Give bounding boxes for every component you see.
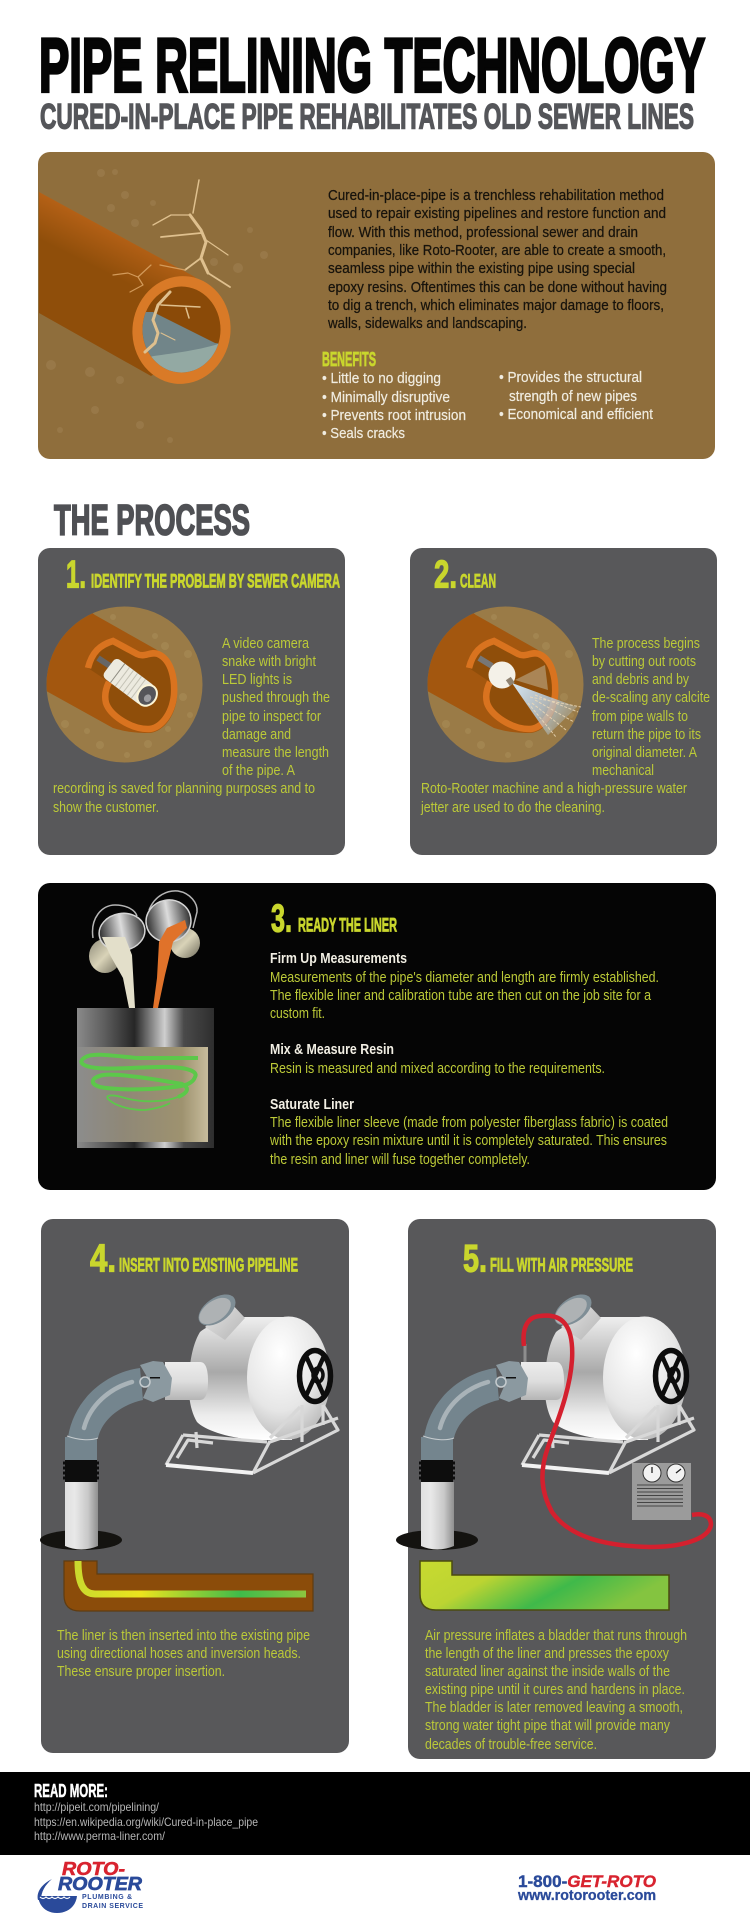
step 2 text: Roto-Rooter machine and a high-pressure water: [421, 780, 687, 797]
red air hose: [524, 1316, 711, 1547]
intro text: companies, like Roto-Rooter, are able to create a smooth,: [328, 242, 666, 259]
benefits list: • Little to no digging: [322, 370, 441, 387]
step 3 text: Mix & Measure Resin: [270, 1041, 394, 1058]
panel: step 4: [40, 1219, 349, 1753]
benefits list: • Seals cracks: [322, 425, 405, 442]
step 2 heading: CLEAN: [460, 572, 496, 592]
intro text: Cured-in-place-pipe is a trenchless rehabilitation method: [328, 187, 664, 204]
step 5 heading: [463, 1238, 633, 1280]
step 5 text: strong water tight pipe that will provide many: [425, 1717, 670, 1734]
step 1 text: LED lights is: [222, 671, 292, 688]
step 1 text: pipe to inspect for: [222, 708, 321, 725]
step 1 text: A video camera: [222, 635, 310, 652]
step 5 text: decades of trouble-free service.: [425, 1736, 597, 1753]
step 3 heading: [271, 898, 397, 940]
step 1 text: [53, 635, 330, 816]
step 2 text: The process begins: [592, 635, 700, 652]
step 1 text: damage and: [222, 726, 291, 743]
icon: sewer camera in pipe: [30, 590, 202, 762]
step 3 text: [269, 950, 668, 1168]
step 2 text: original diameter. A: [592, 744, 697, 761]
step 1 text: show the customer.: [53, 799, 159, 816]
step 2 text: de-scaling any calcite: [592, 689, 710, 706]
step 2 text: from pipe walls to: [592, 708, 688, 725]
icon: cleaning head with water jet: [411, 590, 584, 762]
intro text: walls, sidewalks and landscaping.: [327, 315, 527, 332]
step 3 text: custom fit.: [270, 1005, 325, 1022]
contact: phone and website: www.rotorooter.com: [517, 1887, 656, 1904]
step 2 text: and debris and by: [592, 671, 689, 688]
step 1 text: pushed through the: [222, 689, 330, 706]
intro text: flow. With this method, professional sewer and drain: [328, 224, 638, 241]
step 3 text: Saturate Liner: [270, 1096, 354, 1113]
illustration: cracked pipe with roots: [39, 169, 268, 443]
step 4 text: [57, 1627, 310, 1680]
step 2 text: by cutting out roots: [592, 653, 696, 670]
step 1 heading: IDENTIFY THE PROBLEM BY SEWER CAMERA: [91, 572, 340, 592]
step 5 text: The bladder is later removed leaving a smooth,: [425, 1699, 683, 1716]
step 2 text: [420, 635, 710, 816]
benefits list: • Prevents root intrusion: [322, 407, 466, 424]
intro text: epoxy resins. Oftentimes this can be done without having: [328, 279, 667, 296]
source links: http://www.perma-liner.com/: [34, 1829, 166, 1843]
panel: read more: [0, 1772, 750, 1855]
step 5 text: Air pressure inflates a bladder that runs through: [425, 1627, 687, 1644]
step 1 text: of the pipe. A: [222, 762, 295, 779]
intro text: seamless pipe within the existing pipe using special: [328, 260, 635, 277]
step 2 text: return the pipe to its: [592, 726, 701, 743]
step 3 text: with the epoxy resin mixture until it is completely saturated. This ensures: [269, 1132, 667, 1149]
illustration: inversion machine: [396, 1288, 694, 1550]
diagram: existing pipe with liner: [64, 1561, 313, 1611]
illustration: inversion machine: [40, 1288, 338, 1550]
logo: Roto-Rooter: DRAIN SERVICE: [82, 1903, 143, 1910]
step 5 text: existing pipe until it cures and hardens in place.: [425, 1681, 685, 1698]
step 3 text: the resin and liner will fuse together completely.: [270, 1151, 530, 1168]
step 3 heading: 3.: [271, 898, 292, 940]
contact: phone and website: [517, 1872, 656, 1904]
source links: http://pipeit.com/pipelining/: [34, 1800, 160, 1814]
step 1 text: measure the length: [222, 744, 329, 761]
benefits list: strength of new pipes: [509, 388, 637, 405]
logo: Roto-Rooter: ROOTER: [58, 1874, 142, 1894]
step 5 text: saturated liner against the inside walls of the: [425, 1663, 670, 1680]
benefits list: • Economical and efficient: [499, 406, 654, 423]
step 2 heading: 2.: [434, 554, 457, 596]
step 3 text: The flexible liner sleeve (made from polyester fiberglass fabric) is coated: [270, 1114, 668, 1131]
step 3 heading: READY THE LINER: [298, 916, 397, 936]
step 1 heading: [66, 554, 340, 596]
step 4 text: These ensure proper insertion.: [57, 1663, 225, 1680]
intro text: used to repair existing pipelines and restore function and: [328, 205, 666, 222]
step 1 text: recording is saved for planning purposes and to: [53, 780, 315, 797]
step 1 text: snake with bright: [222, 653, 317, 670]
source links: https://en.wikipedia.org/wiki/Cured-in-place_pipe: [34, 1815, 258, 1829]
step 3 text: Firm Up Measurements: [270, 950, 407, 967]
logo: Roto-Rooter: PLUMBING &: [82, 1894, 132, 1901]
benefits list: • Provides the structural: [499, 369, 642, 386]
step 4 text: The liner is then inserted into the existing pipe: [57, 1627, 310, 1644]
step 5 text: [425, 1627, 687, 1753]
panel: step 2: [410, 548, 717, 855]
icon: resin buckets pouring into can: [77, 891, 214, 1148]
step 1 heading: 1.: [66, 554, 86, 596]
heading: the process: THE PROCESS: [54, 496, 250, 544]
benefits list: [322, 369, 654, 442]
intro text: [327, 187, 667, 332]
panel: introduction: [38, 152, 715, 459]
step 4 text: using directional hoses and inversion heads.: [57, 1645, 301, 1662]
logo: Roto-Rooter: ROTO-: [62, 1859, 125, 1879]
diagram: pipe filled with cured liner: [420, 1561, 669, 1610]
panel: step 1: [30, 548, 345, 855]
panel: step 5: [396, 1219, 716, 1759]
step 5 heading: FILL WITH AIR PRESSURE: [490, 1256, 633, 1276]
step 2 text: mechanical: [592, 762, 654, 779]
source links: [34, 1800, 258, 1843]
step 2 heading: [434, 554, 496, 596]
contact: phone and website: 1-800-GET-ROTO: [518, 1872, 656, 1891]
step 3 text: Resin is measured and mixed according to the requirements.: [270, 1060, 605, 1077]
panel: step 3: [38, 883, 716, 1190]
benefits list: • Minimally disruptive: [322, 389, 450, 406]
step 3 text: The flexible liner and calibration tube are then cut on the job site for a: [270, 987, 652, 1004]
step 4 heading: INSERT INTO EXISTING PIPELINE: [119, 1256, 298, 1276]
benefits heading: BENEFITS: [322, 349, 376, 371]
step 2 text: jetter are used to do the cleaning.: [420, 799, 605, 816]
read more heading: READ MORE:: [34, 1781, 108, 1801]
step 4 heading: 4.: [90, 1238, 116, 1280]
intro text: to dig a trench, which eliminates major damage to floors,: [328, 297, 664, 314]
step 4 heading: [90, 1238, 298, 1280]
logo: Roto-Rooter: [38, 1859, 143, 1913]
step 3 text: Measurements of the pipe's diameter and length are firmly established.: [270, 969, 659, 986]
step 5 text: the length of the liner and presses the epoxy: [425, 1645, 669, 1662]
icon: air compressor with gauges: [632, 1463, 691, 1520]
step 5 heading: 5.: [463, 1238, 487, 1280]
